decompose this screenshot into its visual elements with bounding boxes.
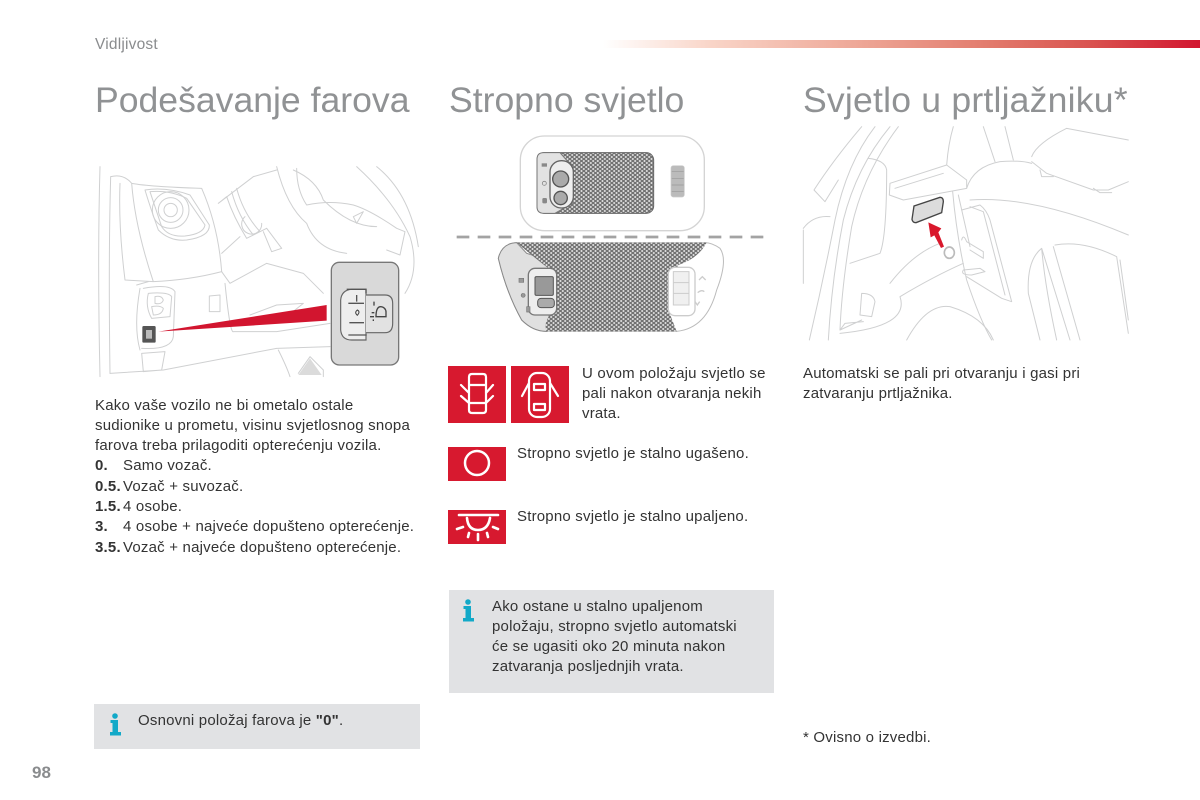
text: headlamp instructions: farova treba prilagoditi opterećenju vozila. [95,437,381,454]
callout text: Ako ostane u stalno upaljenom [492,598,703,614]
text: headlamp instructions: 0. [95,457,108,474]
text: boot light description: Automatski se pali pri otvaranju i gasi pri [803,364,1080,382]
text: headlamp instructions: 3. [95,518,108,535]
dashed divider [457,233,768,241]
text: boot light description [803,364,1080,402]
icon: door position 2 [511,366,569,423]
heading: headlamp adjustment: Podešavanje farova [95,80,410,120]
callout text: položaju, stropno svjetlo automatski [492,618,737,635]
callout text [492,598,737,675]
text: door position description [582,364,766,422]
illustration: boot interior [803,127,1128,340]
grip ring [944,247,954,258]
text: boot light description: zatvaranju prtljažnika. [803,385,953,402]
callout: auto switch-off [449,590,774,693]
illustration: dashboard with headlamp adjuster [99,167,418,377]
text: headlamp instructions: 0.5. [95,478,121,495]
icon: info [110,713,121,736]
lower view [498,243,723,331]
heading: boot light: Svjetlo u prtljažniku* [803,80,1128,120]
text: door position description: U ovom položaju svjetlo se [582,364,766,382]
text: headlamp instructions: 1.5. [95,498,121,515]
icon: info [463,599,474,622]
text: headlamp instructions: Kako vaše vozilo ne bi ometalo ostale [95,396,353,414]
text: light off description: Stropno svjetlo je stalno ugašeno. [517,444,749,462]
heading: ceiling light: Stropno svjetlo [449,80,684,120]
illustration: ceiling light views [457,136,768,331]
callout text: će se ugasiti oko 20 minuta nakon [492,638,725,655]
text: headlamp instructions: Vozač + suvozač. [123,478,243,495]
callout text: Osnovni položaj farova je "0". [138,712,343,728]
text: headlamp instructions: 3.5. [95,539,121,556]
header gradient bar [603,40,1200,48]
text: door position description: pali nakon otvaranja nekih [582,385,762,402]
section label: Vidljivost [95,36,158,52]
upper view [520,136,704,231]
icon: light off [448,447,506,481]
text: headlamp instructions: sudionike u prometu, visinu svjetlosnog snopa [95,417,410,434]
footnote: * Ovisno o izvedbi. [803,728,931,746]
text: headlamp instructions: 4 osobe. [123,498,182,515]
red pointer [158,305,327,332]
callout: base position [94,704,420,749]
icon: light on [448,510,506,544]
text: headlamp instructions: Samo vozač. [123,457,212,474]
text: door position description: vrata. [582,405,621,422]
callout text: zatvaranja posljednjih vrata. [492,658,684,675]
page number: 98 [32,762,51,782]
inset panel [331,262,399,365]
red arrow [928,222,944,248]
text: headlamp instructions: Vozač + najveće dopušteno opterećenje. [123,539,401,556]
icon: door position 1 [448,366,506,423]
light unit [912,197,943,223]
text: headlamp instructions [95,396,414,556]
adjuster wheel small [142,326,156,343]
text: light on description: Stropno svjetlo je stalno upaljeno. [517,508,748,524]
text: headlamp instructions: 4 osobe + najveće dopušteno opterećenje. [123,518,414,535]
